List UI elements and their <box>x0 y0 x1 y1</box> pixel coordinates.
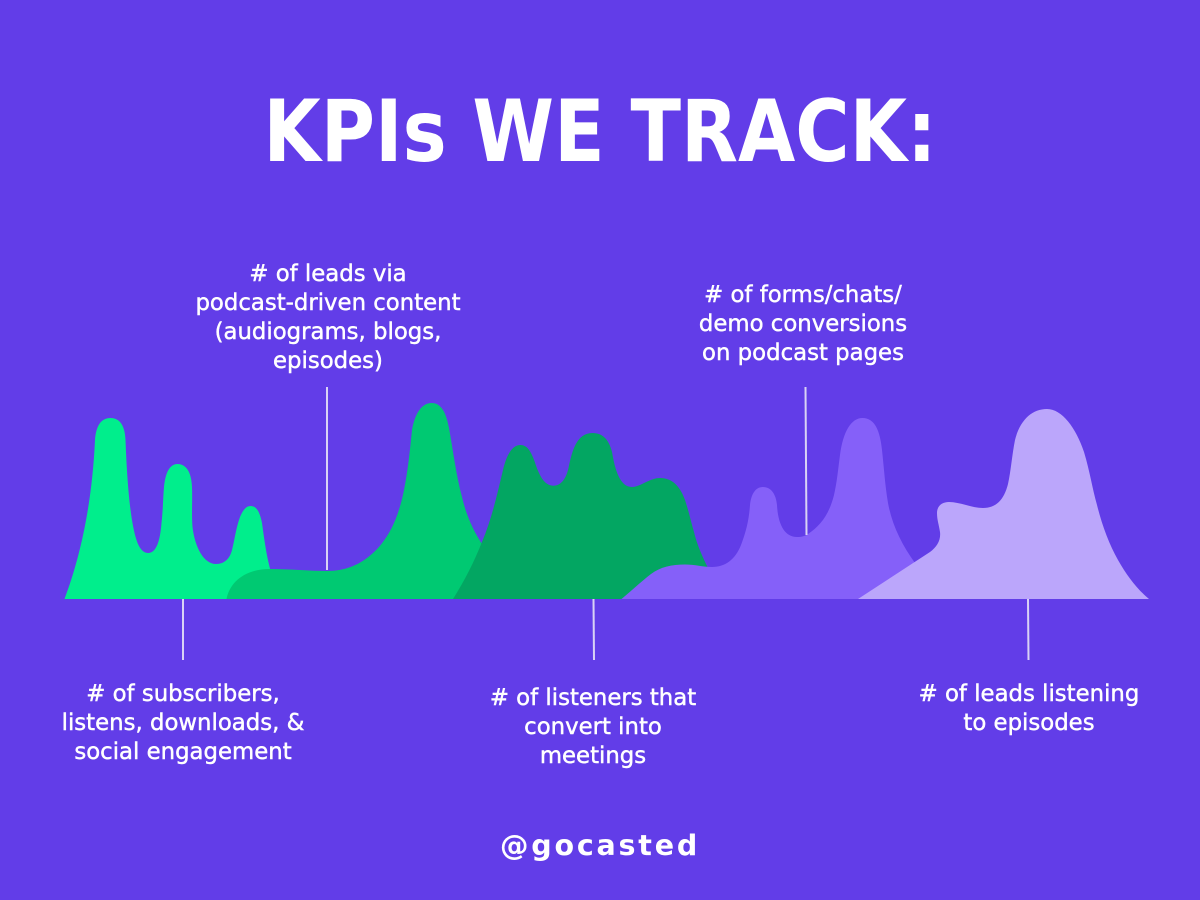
label: leads listening: to episodes <box>963 710 1095 736</box>
area: subscribers <box>64 418 282 599</box>
label: conversions: demo conversions <box>699 311 907 337</box>
label: leads listening: # of leads listening <box>919 681 1139 707</box>
label: leads via content: # of leads via <box>249 261 407 287</box>
label: leads via content <box>195 261 461 374</box>
label: leads listening <box>919 681 1139 736</box>
label: subscribers: # of subscribers, <box>86 681 280 707</box>
area: leads via content <box>226 403 515 599</box>
leader line: leads listening <box>1027 599 1030 660</box>
label: subscribers <box>62 681 304 765</box>
area: leads listening <box>858 409 1149 599</box>
label: conversions <box>699 282 907 366</box>
label: leads via content: podcast-driven content <box>195 290 461 316</box>
label: listeners: meetings <box>540 743 646 769</box>
label: listeners <box>490 685 696 769</box>
label: conversions: on podcast pages <box>702 340 904 366</box>
label: listeners: # of listeners that <box>490 685 696 711</box>
label: listeners: convert into <box>524 714 662 740</box>
label: subscribers: listens, downloads, & <box>62 710 304 736</box>
leader line: listeners <box>592 599 595 660</box>
area: conversions <box>622 418 945 599</box>
title: KPIs WE TRACK: <box>263 82 937 182</box>
leader line: conversions <box>806 387 807 535</box>
label: subscribers: social engagement <box>74 739 292 765</box>
leader line: subscribers <box>182 599 184 660</box>
label: leads via content: (audiograms, blogs, <box>215 319 441 345</box>
area: listeners <box>453 433 728 599</box>
label: leads via content: episodes) <box>273 348 383 374</box>
handle: @gocasted <box>500 829 700 862</box>
leader line: leads via content <box>326 387 328 570</box>
label: conversions: # of forms/chats/ <box>704 282 902 308</box>
